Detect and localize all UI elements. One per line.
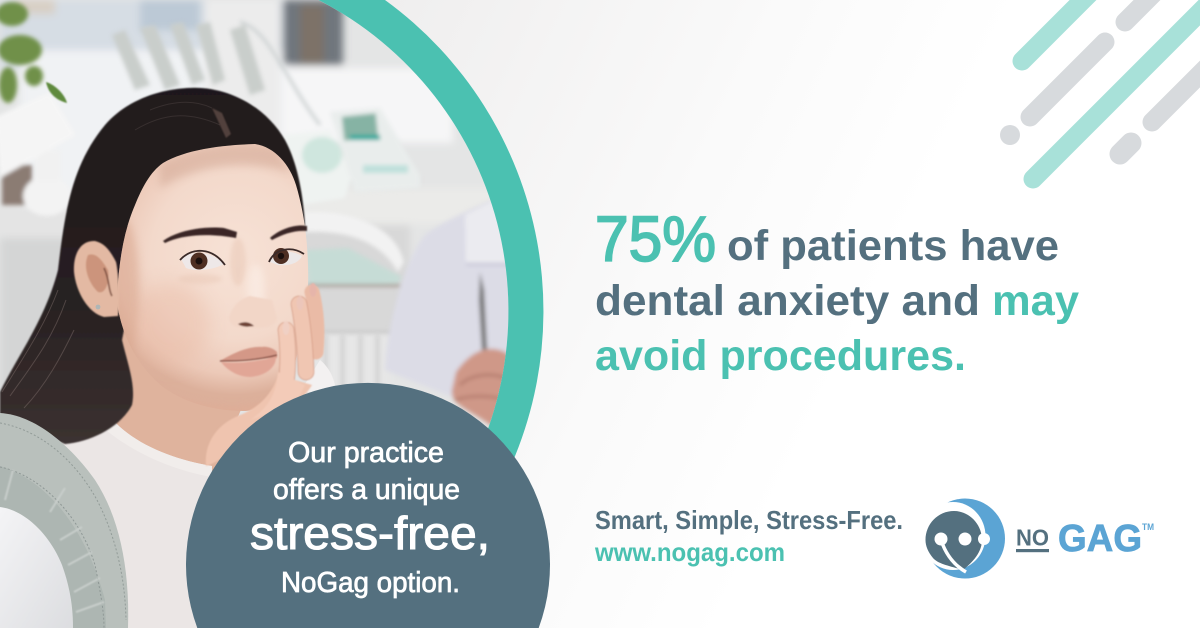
tray machine (291, 144, 350, 200)
shirt (117, 424, 212, 466)
callout text: offers a unique (273, 474, 460, 506)
logo: NoGag (920, 498, 1154, 578)
plant leaves (0, 2, 67, 103)
slate callout circle (186, 383, 550, 628)
stripe: grey short (1120, 143, 1131, 154)
hair (0, 88, 305, 444)
stripe: teal long (1033, 0, 1200, 179)
stripe: grey top (1125, 0, 1165, 22)
nose (236, 296, 270, 328)
logo wordmark: GAG (1058, 518, 1142, 560)
tagline (594, 505, 903, 567)
eye socket and nose shading (230, 238, 246, 286)
stripe: grey dot (1000, 125, 1020, 145)
callout text (250, 437, 490, 599)
chair arm and counter (304, 212, 404, 272)
left eye (180, 251, 225, 270)
headline (595, 203, 1079, 380)
headline: of patients have (727, 222, 1059, 270)
lips (220, 347, 277, 377)
forehead hairline shadow (160, 145, 290, 188)
logo wordmark: TM (1142, 522, 1154, 532)
headline: dental anxiety and (595, 277, 980, 325)
jaw shadow (246, 410, 248, 411)
teal arc (318, 0, 543, 520)
earring (96, 305, 100, 309)
hair part (212, 108, 231, 138)
tagline: Smart, Simple, Stress-Free. (595, 505, 903, 535)
callout text: Our practice (288, 437, 444, 469)
doctor's white coat (386, 214, 508, 392)
stripe: teal short (1022, 0, 1105, 61)
logo wordmark (1016, 518, 1154, 560)
eyebrows (163, 228, 237, 243)
headline: avoid procedures. (595, 332, 966, 380)
ear (74, 241, 119, 317)
logo wordmark: NO (1016, 524, 1049, 550)
neck (116, 330, 240, 471)
hand on cheek (206, 283, 317, 466)
right eye (269, 248, 304, 265)
stripe: grey middle (1030, 42, 1105, 117)
decorative diagonal stripes (1010, 0, 1200, 179)
face (111, 144, 308, 425)
dental unit arms (112, 22, 265, 95)
logo icon (920, 498, 1005, 578)
tagline: www.nogag.com (594, 537, 785, 567)
callout text: NoGag option. (281, 567, 460, 599)
lamp shadow and bulb (2, 165, 32, 205)
callout text: stress-free, (250, 507, 490, 559)
headline: 75% (595, 203, 716, 275)
photo: anxious patient in dental clinic (0, 0, 550, 628)
hair strands (2, 102, 220, 408)
cheek blush (141, 282, 211, 356)
headline: may (992, 277, 1079, 325)
stripe: grey right (1152, 44, 1200, 122)
doctor's hand (452, 349, 510, 425)
chair headrest (0, 413, 128, 628)
